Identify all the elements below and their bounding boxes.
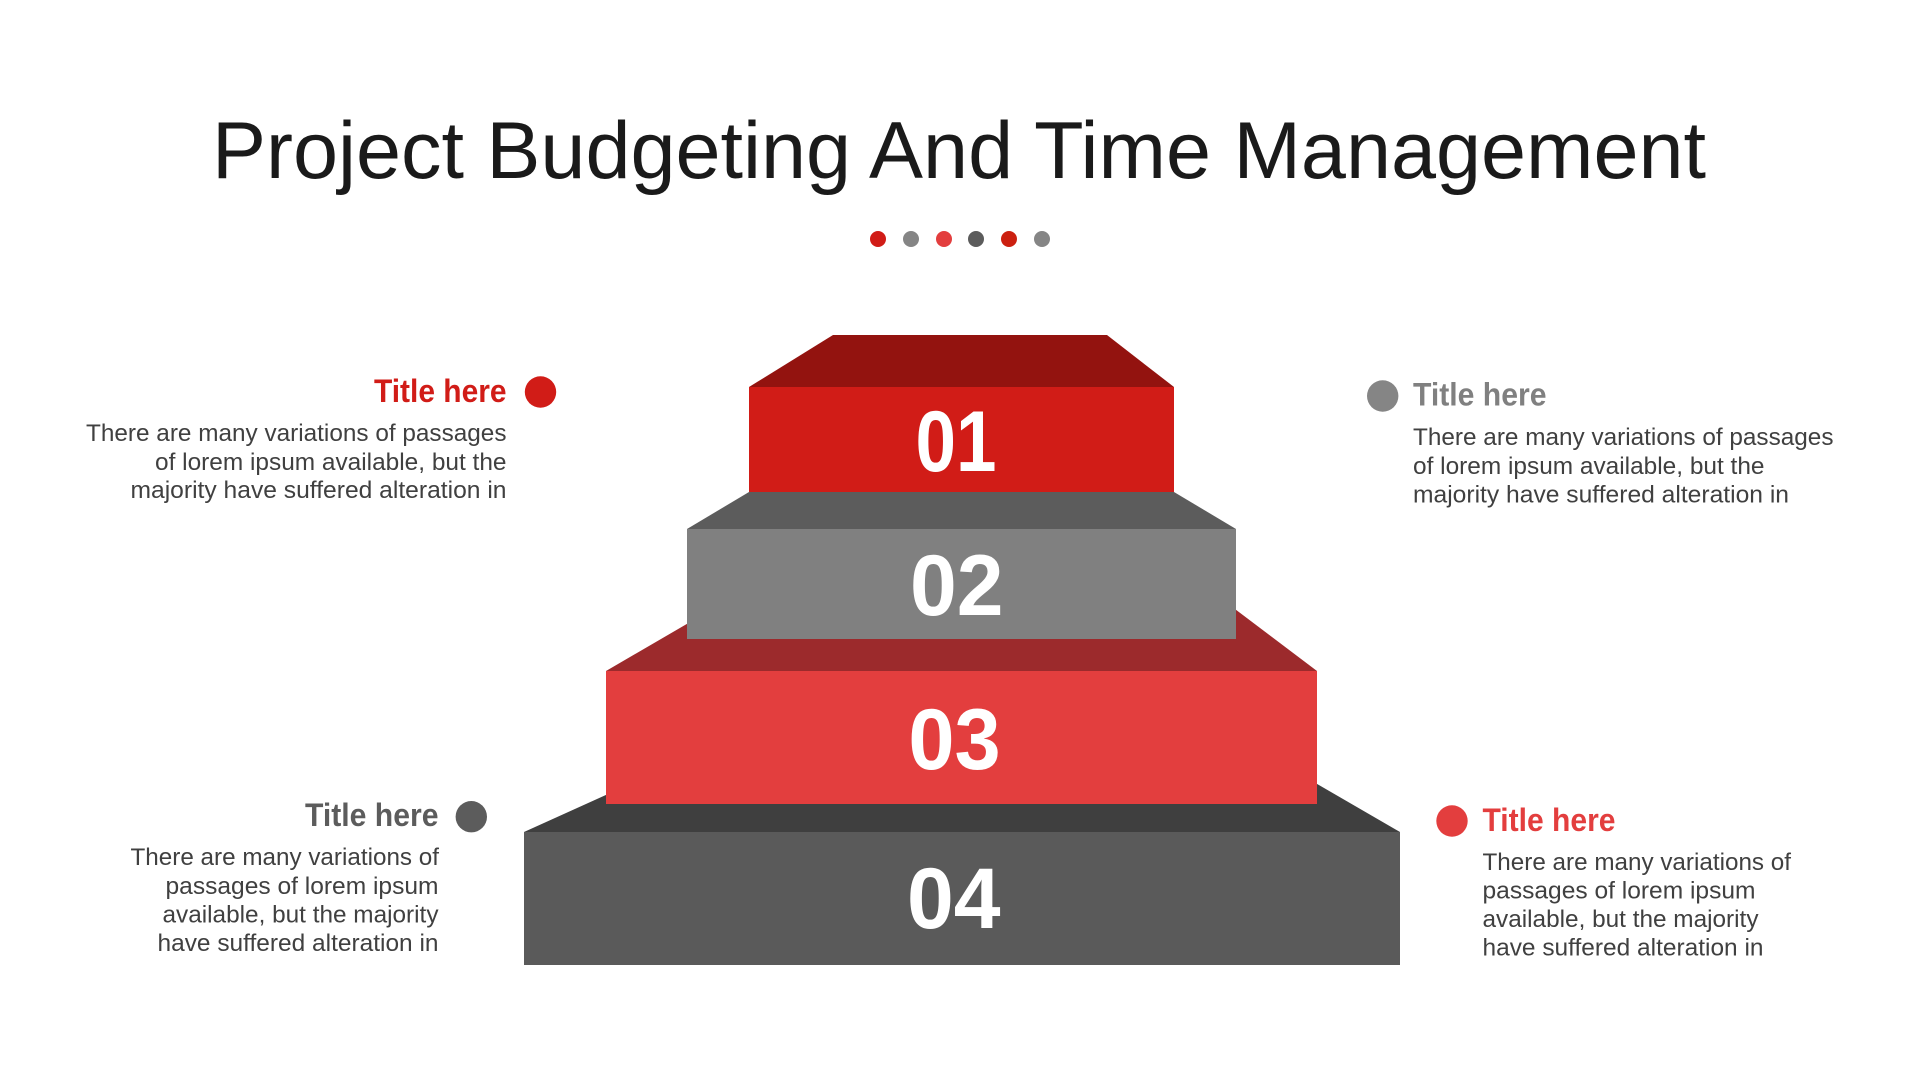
callout: bottom left: have suffered alteration in: [158, 930, 438, 957]
callout: bottom left: [130, 797, 487, 957]
tier 03: 03: [908, 692, 1001, 788]
callout: bottom right: [1436, 802, 1791, 962]
tier 02: 02: [910, 538, 1004, 634]
callout: top left: of lorem ipsum available, but the: [155, 449, 506, 476]
stepped pyramid: [524, 335, 1400, 965]
callout: bottom right: available, but the majority: [1482, 906, 1759, 933]
callout: top right: majority have suffered alteration in: [1413, 482, 1789, 508]
callout: top left: majority have suffered alteration in: [130, 477, 506, 504]
tier 04: [524, 770, 1400, 965]
tier 04: 04: [907, 851, 1001, 947]
callout: bottom left: passages of lorem ipsum: [166, 873, 438, 900]
tier 01: 01: [916, 394, 996, 490]
callout: top right: of lorem ipsum available, but the: [1413, 453, 1764, 480]
callout: top right: Title here: [1413, 376, 1546, 412]
callout: bottom left: There are many variations of: [130, 844, 439, 871]
title: Project Budgeting And Time Management: [212, 106, 1706, 196]
callout: bottom right: have suffered alteration in: [1482, 934, 1764, 962]
tier 02: [687, 492, 1236, 639]
callout: bottom left: available, but the majority: [162, 902, 439, 928]
tier 01: [749, 335, 1174, 492]
callout: top left: [86, 373, 556, 504]
callout: top right: [1367, 376, 1834, 508]
callout: top left: There are many variations of passages: [86, 420, 506, 447]
callout: bottom right: Title here: [1482, 802, 1616, 838]
callout: top left: Title here: [374, 373, 506, 409]
callout: top right: There are many variations of passages: [1413, 424, 1834, 451]
decorative dot row under title: [870, 231, 1050, 247]
callout: bottom right: There are many variations of: [1482, 849, 1791, 876]
callout: bottom right: passages of lorem ipsum: [1482, 878, 1756, 904]
callout: bottom left: Title here: [305, 797, 438, 833]
tier 03: [606, 600, 1317, 804]
